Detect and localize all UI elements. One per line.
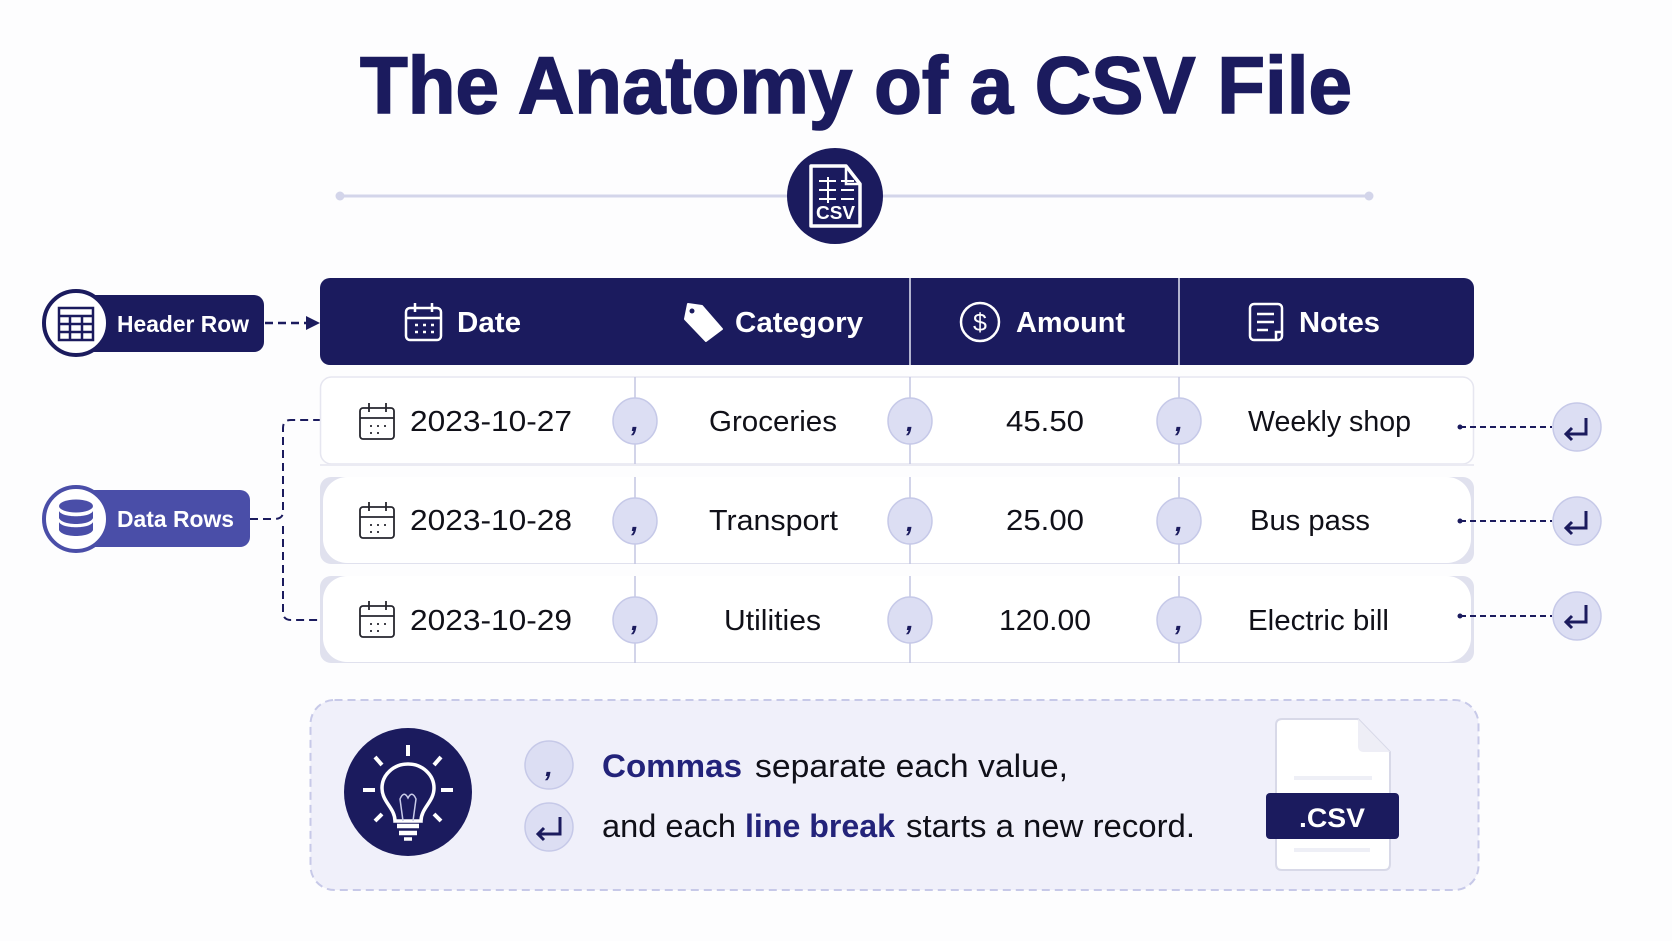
data row 1: Weekly shop: [1248, 406, 1411, 438]
label: header row: Header Row: [117, 311, 249, 337]
comma separators: ,: [630, 506, 639, 537]
comma separators: [613, 498, 1201, 544]
line break marker: row 1: [1458, 403, 1601, 451]
comma separators: ,: [1174, 506, 1183, 537]
comma separators: ,: [630, 605, 639, 636]
column: category: Category: [735, 307, 863, 339]
panel: takeaway callout: [310, 700, 1478, 890]
icon: .csv file: [1266, 719, 1399, 870]
data row 3: Electric bill: [1248, 605, 1389, 637]
icon: calendar: [360, 403, 394, 439]
data row 2: Bus pass: [1250, 505, 1370, 537]
arrow: header label to header row: [265, 316, 320, 330]
column: amount: [961, 303, 1125, 341]
data row 3: [320, 576, 1474, 663]
icon: calendar: [360, 601, 394, 637]
icon: light bulb: [344, 728, 472, 856]
callout text: [602, 748, 1195, 844]
column: date: Date: [457, 307, 521, 339]
callout text: Commas: [602, 748, 742, 784]
label: data rows: [44, 487, 250, 551]
comma separators: ,: [905, 605, 914, 636]
data row 1: 2023-10-27: [410, 406, 572, 438]
data row 2: Transport: [709, 505, 838, 537]
comma separators: [613, 398, 1201, 444]
comma symbol: ,: [544, 751, 553, 782]
data row 1: 45.50: [1006, 406, 1084, 438]
data row 3: Utilities: [724, 605, 821, 637]
label: header row: [44, 291, 264, 355]
column: notes: Notes: [1299, 307, 1380, 339]
title divider with CSV icon: [336, 148, 1374, 244]
column: amount: Amount: [1016, 307, 1125, 339]
title: The Anatomy of a CSV File: [360, 41, 1352, 131]
data row 2: 25.00: [1006, 505, 1084, 537]
comma separators: ,: [905, 406, 914, 437]
comma separators: ,: [905, 506, 914, 537]
callout text: starts a new record.: [906, 808, 1195, 844]
data row 1: [320, 377, 1474, 465]
column: category: [685, 304, 863, 341]
comma separators: ,: [630, 406, 639, 437]
icon: .csv file: .CSV: [1299, 803, 1365, 833]
icon: calendar: [360, 502, 394, 538]
callout text: and each: [602, 808, 736, 844]
callout text: line break: [745, 808, 895, 844]
comma separators: ,: [1174, 406, 1183, 437]
bracket: data rows to each row: [250, 420, 320, 620]
data row 3: 120.00: [999, 605, 1091, 637]
line break symbol: [525, 803, 573, 851]
line break marker: row 3: [1458, 592, 1601, 640]
data row 2: [320, 477, 1474, 564]
callout text: separate each value,: [755, 748, 1068, 784]
column: notes: [1250, 304, 1380, 340]
column: date: [406, 303, 521, 340]
comma symbol: [525, 741, 573, 789]
data row 1: Groceries: [709, 406, 837, 438]
panel: header row: [320, 278, 1474, 365]
line break marker: row 2: [1458, 497, 1601, 545]
comma separators: ,: [1174, 605, 1183, 636]
label: data rows: Data Rows: [117, 506, 234, 532]
column: amount: $: [973, 309, 987, 337]
comma separators: [613, 597, 1201, 643]
data row 3: 2023-10-29: [410, 605, 572, 637]
title divider with CSV icon: CSV: [816, 203, 855, 223]
data row 2: 2023-10-28: [410, 505, 572, 537]
